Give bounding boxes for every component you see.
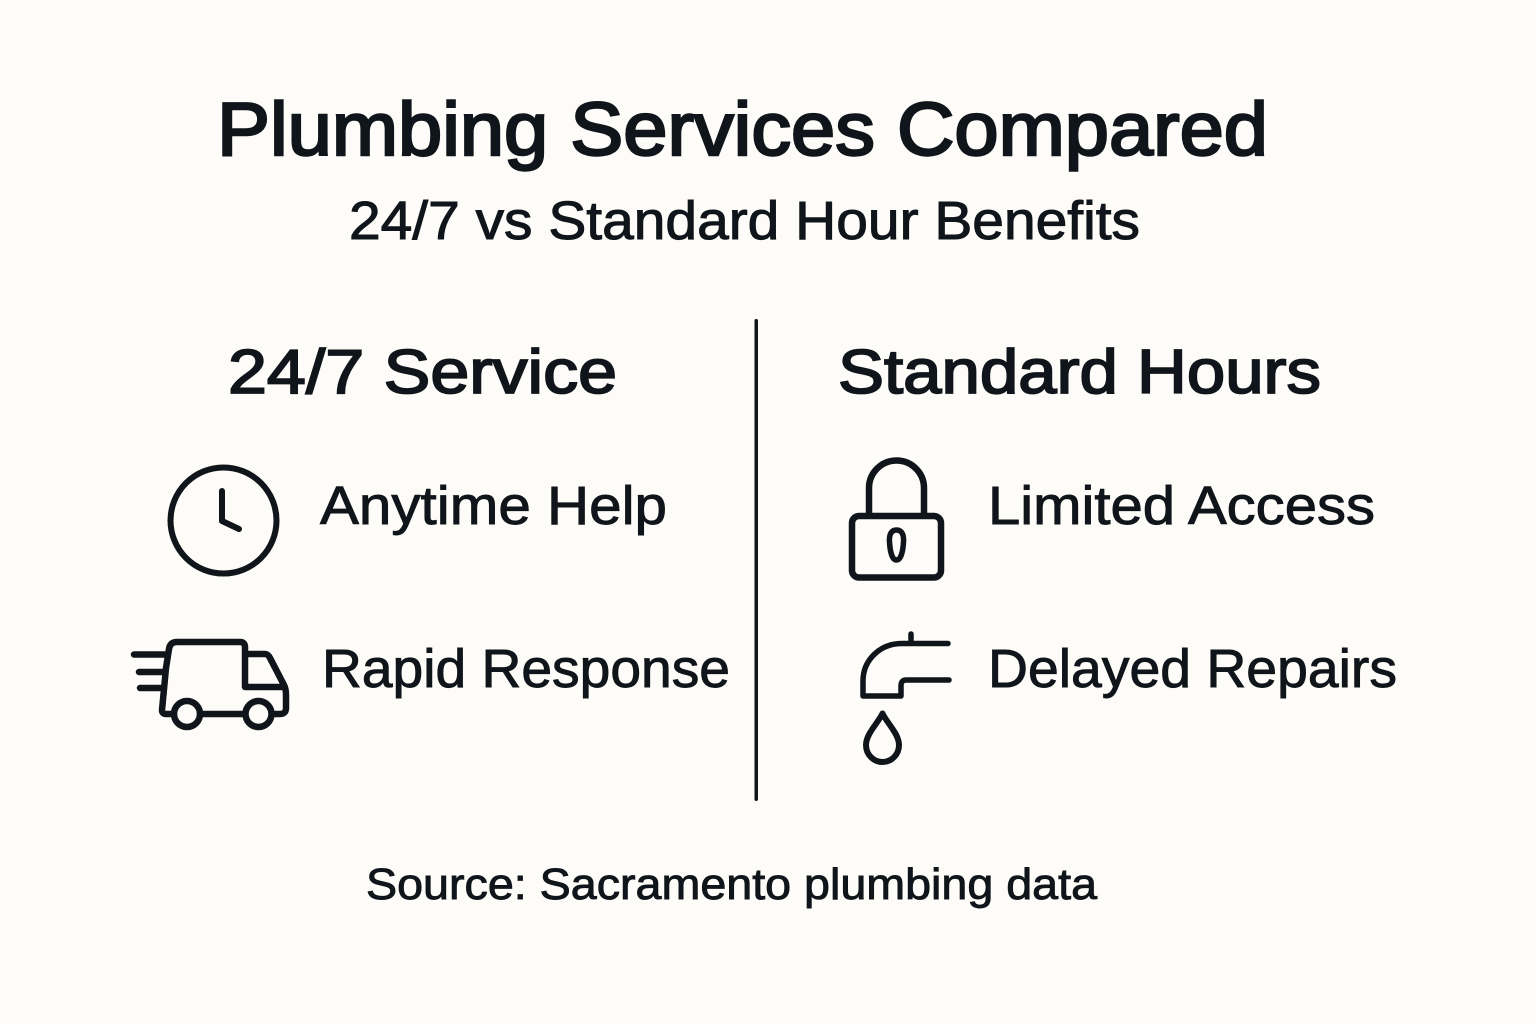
panel: standard hours xyxy=(838,338,1397,762)
label: Limited Access: Limited Access xyxy=(988,476,1375,536)
center divider xyxy=(754,319,758,801)
label: Anytime Help: Anytime Help xyxy=(320,476,667,536)
icon: clock xyxy=(170,468,276,574)
label: Rapid Response: Rapid Response xyxy=(322,639,730,699)
heading: 24/7 Service: 24/7 Service xyxy=(228,338,617,407)
heading: Standard Hours: Standard Hours xyxy=(838,338,1321,407)
icon: speeding van xyxy=(134,642,286,727)
panel: 24/7 service xyxy=(134,338,730,727)
icon: dripping faucet xyxy=(863,634,949,762)
title: Plumbing Services Compared xyxy=(217,87,1268,171)
label: Delayed Repairs: Delayed Repairs xyxy=(988,639,1397,699)
icon: padlock xyxy=(852,460,941,578)
subtitle: 24/7 vs Standard Hour Benefits xyxy=(349,191,1140,251)
source note: Source: Sacramento plumbing data xyxy=(366,860,1098,909)
